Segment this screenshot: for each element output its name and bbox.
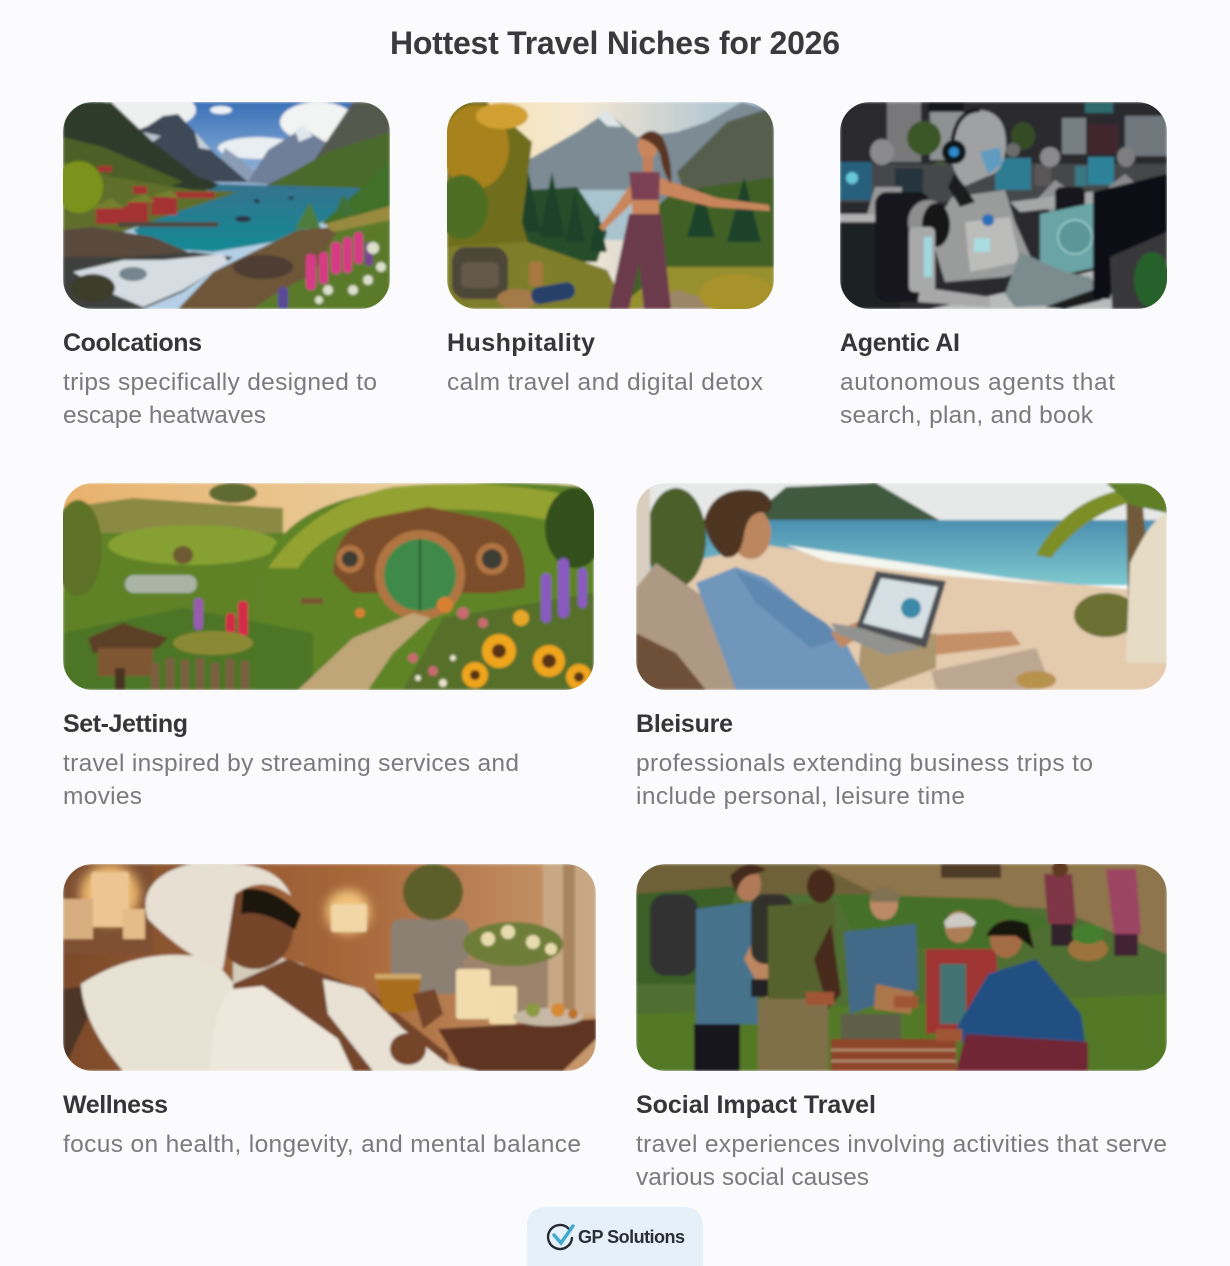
image: woman stretching in mountain valley	[436, 102, 775, 314]
title: Hottest Travel Niches for 2026	[390, 25, 840, 61]
heading: Wellness	[63, 1091, 168, 1119]
background workers	[1044, 861, 1141, 961]
backpack and gear	[452, 247, 508, 299]
description: professionals extending business trips to	[636, 750, 1093, 777]
description	[636, 1131, 1167, 1191]
panel: Set-Jetting	[54, 483, 605, 810]
heading: Hushpitality	[447, 329, 595, 357]
panel: Coolcations	[55, 90, 390, 429]
big robot	[930, 190, 1035, 282]
candles	[63, 864, 370, 939]
birdhouse and fence	[88, 623, 168, 653]
palm	[1124, 500, 1147, 598]
description: search, plan, and book	[840, 402, 1094, 429]
panel: Social Impact Travel	[636, 861, 1167, 1191]
heading: Set-Jetting	[63, 710, 188, 738]
person 4 elder woman	[926, 911, 1001, 1034]
sunflowers	[462, 610, 592, 690]
panel: Bleisure	[636, 483, 1167, 810]
description: include personal, leisure time	[636, 783, 965, 810]
description: travel experiences involving activities that serve	[636, 1131, 1167, 1158]
pillow	[63, 986, 88, 1059]
description: focus on health, longevity, and mental balance	[63, 1131, 581, 1158]
heading: Agentic AI	[840, 329, 960, 357]
person 3	[840, 887, 920, 1040]
image: man with laptop on beach lounger	[636, 483, 1167, 690]
heading: Coolcations	[63, 329, 202, 357]
image: fjord with red cabins and lupins	[55, 90, 390, 309]
heading: Bleisure	[636, 710, 733, 738]
description: travel inspired by streaming services and	[63, 750, 519, 777]
laptop	[856, 571, 946, 648]
icon: check mark logo	[548, 1225, 573, 1249]
description	[636, 750, 1093, 810]
description: various social causes	[636, 1164, 869, 1191]
description	[63, 369, 377, 429]
description: calm travel and digital detox	[447, 369, 763, 396]
panel: Agentic AI	[840, 102, 1170, 429]
description	[63, 750, 519, 810]
foreground monitors and plant	[1093, 174, 1167, 299]
description: movies	[63, 783, 142, 810]
heading: Social Impact Travel	[636, 1091, 876, 1119]
image: volunteers building with locals	[636, 861, 1167, 1071]
person 2	[751, 869, 841, 1071]
woman	[652, 176, 770, 211]
table and tray	[438, 1019, 596, 1071]
person 5 in blue	[956, 920, 1088, 1071]
hobbit hole	[333, 507, 525, 593]
description	[840, 369, 1115, 429]
bricks	[806, 992, 962, 1071]
footer badge: GP Solutions	[527, 1207, 703, 1266]
tea cup	[375, 976, 421, 1013]
panel: Hushpitality	[436, 102, 775, 396]
description: trips specifically designed to	[63, 369, 377, 396]
man	[934, 630, 1022, 656]
image: woman in robe with tea and candles	[63, 863, 596, 1071]
image: robot agent at desk in office	[840, 102, 1170, 309]
description: escape heatwaves	[63, 402, 266, 429]
woman	[233, 959, 448, 1071]
lounger	[931, 648, 1046, 690]
description: autonomous agents that	[840, 369, 1115, 396]
panel: Wellness	[63, 863, 596, 1158]
person 1 with backpack	[650, 864, 781, 1071]
logo wordmark: GP Solutions	[578, 1227, 685, 1247]
image: hobbit house with garden	[54, 483, 605, 690]
